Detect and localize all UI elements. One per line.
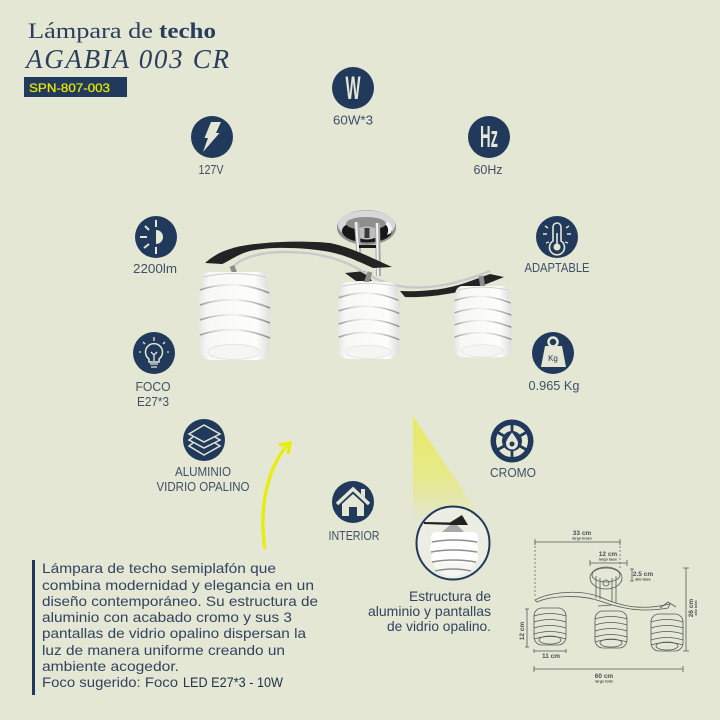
spec: lumens: 2200lm <box>133 262 177 276</box>
dimension labels: largo base <box>599 558 617 562</box>
title: AGABIA 003 CR <box>24 44 230 74</box>
description text block: aluminio con acabado cromo y sus 3 <box>42 609 292 625</box>
arrow <box>263 443 290 549</box>
model code badge <box>24 77 127 97</box>
description text block: combina modernidad y elegancia en un <box>42 577 314 593</box>
description text block: ambiente acogedor. <box>42 658 179 674</box>
spec: frequency: 60Hz <box>474 163 502 177</box>
spec: materials <box>156 419 250 494</box>
spec: frequency <box>468 116 510 177</box>
dimension labels: 11 cm <box>542 653 560 660</box>
dimension labels: 26 cm <box>688 599 695 617</box>
spec: weight <box>528 332 580 393</box>
chrome tube <box>232 252 490 287</box>
detail caption: de vidrio opalino. <box>387 618 491 634</box>
spec: watts <box>332 67 374 128</box>
spec: bulb <box>133 332 175 409</box>
dimension labels: 2.5 cm <box>633 571 653 578</box>
dimension labels: largo brazo <box>572 536 592 540</box>
title <box>24 18 230 74</box>
model code badge: SPN-807-003 <box>29 81 110 95</box>
right arm <box>345 271 504 297</box>
detail caption <box>368 588 491 634</box>
spec: weight: 0.965 Kg <box>528 379 580 393</box>
dimension lines <box>525 539 689 672</box>
title: Lámpara de <box>28 18 153 43</box>
detail caption: aluminio y pantallas <box>368 603 491 619</box>
shade holders <box>232 266 483 288</box>
spec: watts: W <box>346 70 361 106</box>
description text block: LED E27*3 - 10W <box>183 674 284 690</box>
right shade <box>453 286 512 357</box>
dimension labels: alto base <box>635 578 651 582</box>
detail caption: Estructura de <box>409 588 491 604</box>
spec: voltage <box>191 116 233 177</box>
right outline shade <box>651 614 683 651</box>
lamp outline <box>535 567 676 610</box>
spec: finish <box>490 420 536 480</box>
description text block: luz de manera uniforme creando un <box>42 642 285 658</box>
spec: voltage: 127V <box>198 163 224 177</box>
dimension labels: 12 cm <box>599 551 617 558</box>
spec: bulb: FOCO <box>136 380 171 394</box>
title: techo <box>159 18 216 43</box>
description text block: diseño contemporáneo. Su estructura de <box>42 593 318 609</box>
dimension labels: 33 cm <box>573 530 591 537</box>
spec: lumens <box>133 216 177 276</box>
description text block <box>32 560 318 695</box>
spec: frequency: Hz <box>480 119 498 154</box>
dimension labels: 60 cm <box>595 673 613 680</box>
description text block: Foco sugerido: Foco <box>42 674 178 690</box>
left outline shade <box>534 608 566 645</box>
spec: temperature: ADAPTABLE <box>524 261 590 275</box>
spec: indoor use: INTERIOR <box>328 529 380 543</box>
dimension labels: 12 cm <box>519 622 526 640</box>
spec: materials: VIDRIO OPALINO <box>156 480 250 494</box>
dimension labels: alto total <box>694 601 698 615</box>
spec: temperature <box>524 216 590 275</box>
light cone <box>413 416 476 522</box>
detail circle <box>416 506 490 580</box>
spec: materials: ALUMINIO <box>175 465 231 479</box>
centre outline shade <box>595 611 627 648</box>
left arm <box>205 242 392 268</box>
left shade <box>198 272 271 360</box>
lamp photo <box>198 210 512 360</box>
spec: watts: 60W*3 <box>333 114 373 128</box>
dimension labels: largo total <box>595 680 613 684</box>
spec: finish: CROMO <box>490 466 536 480</box>
description text block: pantallas de vidrio opalino dispersan la <box>42 625 306 641</box>
dimension diagram <box>519 530 698 684</box>
centre shade <box>337 282 400 359</box>
ceiling plate <box>337 210 396 276</box>
spec: indoor use <box>328 481 380 543</box>
description text block: Lámpara de techo semiplafón que <box>42 560 276 576</box>
dimension labels <box>519 530 698 684</box>
spec: weight: Kg <box>548 354 558 363</box>
spec: bulb: E27*3 <box>137 395 169 409</box>
